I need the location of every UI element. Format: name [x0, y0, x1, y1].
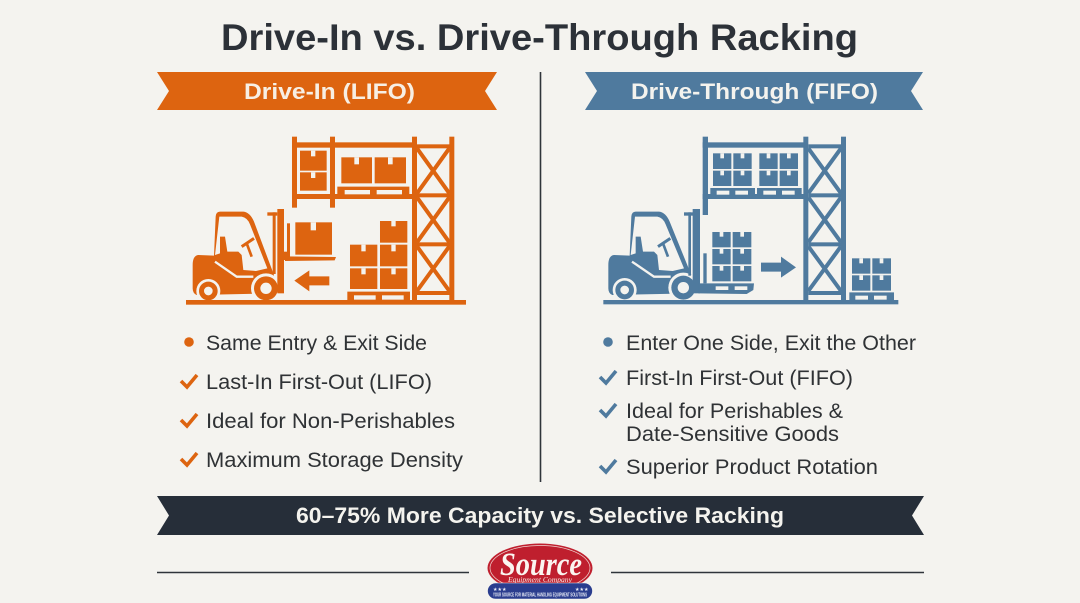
- logo: Source Equipment Company: ★★★: [493, 587, 507, 593]
- bullet: FIFO: First-In First-Out (FIFO): [626, 367, 853, 390]
- logo: Source Equipment Company: Equipment Company: [507, 576, 573, 584]
- logo: Source Equipment Company: ★★★: [575, 587, 589, 593]
- footer rule right: [611, 572, 924, 574]
- banner: drive-in: [157, 72, 497, 110]
- logo: Source Equipment Company: Source: [500, 547, 582, 583]
- panel: drive-through: [585, 72, 923, 479]
- arrow: retrieve to the left: [294, 270, 329, 291]
- bullet list: drive-in: [181, 332, 464, 472]
- forklift: [608, 209, 754, 303]
- bullet: product rotation: Superior Product Rotation: [626, 456, 878, 479]
- bullet: LIFO: Last-In First-Out (LIFO): [206, 371, 432, 394]
- upper rack boxes: [710, 153, 802, 195]
- bullet: perishables: Date-Sensitive Goods: [626, 423, 839, 446]
- upper rack boxes: [300, 151, 409, 195]
- bullet: enter one side: Enter One Side, Exit the Other: [626, 332, 916, 355]
- rack structure: [292, 137, 454, 300]
- exit pallet boxes: [849, 258, 894, 300]
- bullet: storage density: Maximum Storage Density: [206, 449, 464, 472]
- bullet: perishables: Ideal for Perishables &: [626, 400, 843, 423]
- banner: drive-through: Drive-Through (FIFO): [631, 79, 878, 104]
- bullet list: drive-through: [600, 332, 916, 479]
- bullet: same entry and exit side: Same Entry & Exit Side: [206, 332, 427, 355]
- capacity banner: [157, 496, 924, 535]
- rack structure: [703, 137, 846, 300]
- floor line: [186, 300, 466, 305]
- footer rule left: [157, 572, 469, 574]
- title: Drive-In vs. Drive-Through Racking: [221, 17, 858, 58]
- floor line: [603, 300, 898, 304]
- panel: drive-in: [157, 72, 497, 472]
- capacity banner: 60–75% More Capacity vs. Selective Racking: [296, 503, 784, 528]
- carried box: [295, 222, 332, 255]
- stacked pallet boxes: [347, 221, 410, 300]
- banner: drive-through: [585, 72, 923, 110]
- banner: drive-in: Drive-In (LIFO): [244, 79, 415, 104]
- illustration: forklift moving load through rack: [603, 137, 898, 304]
- bullet: perishables: [600, 400, 843, 446]
- logo: Source Equipment Company: [488, 544, 592, 599]
- illustration: forklift placing load into drive-in rack: [186, 137, 466, 305]
- forklift: [193, 209, 336, 303]
- bullet: non-perishables: Ideal for Non-Perishables: [206, 410, 455, 433]
- logo: Source Equipment Company: YOUR SOURCE FOR MATERIAL HANDLING EQUIPMENT SOLUTIONS: [493, 592, 587, 598]
- arrow: exit to the right: [761, 257, 796, 278]
- centre divider: [540, 72, 542, 482]
- carried boxes: [712, 232, 751, 290]
